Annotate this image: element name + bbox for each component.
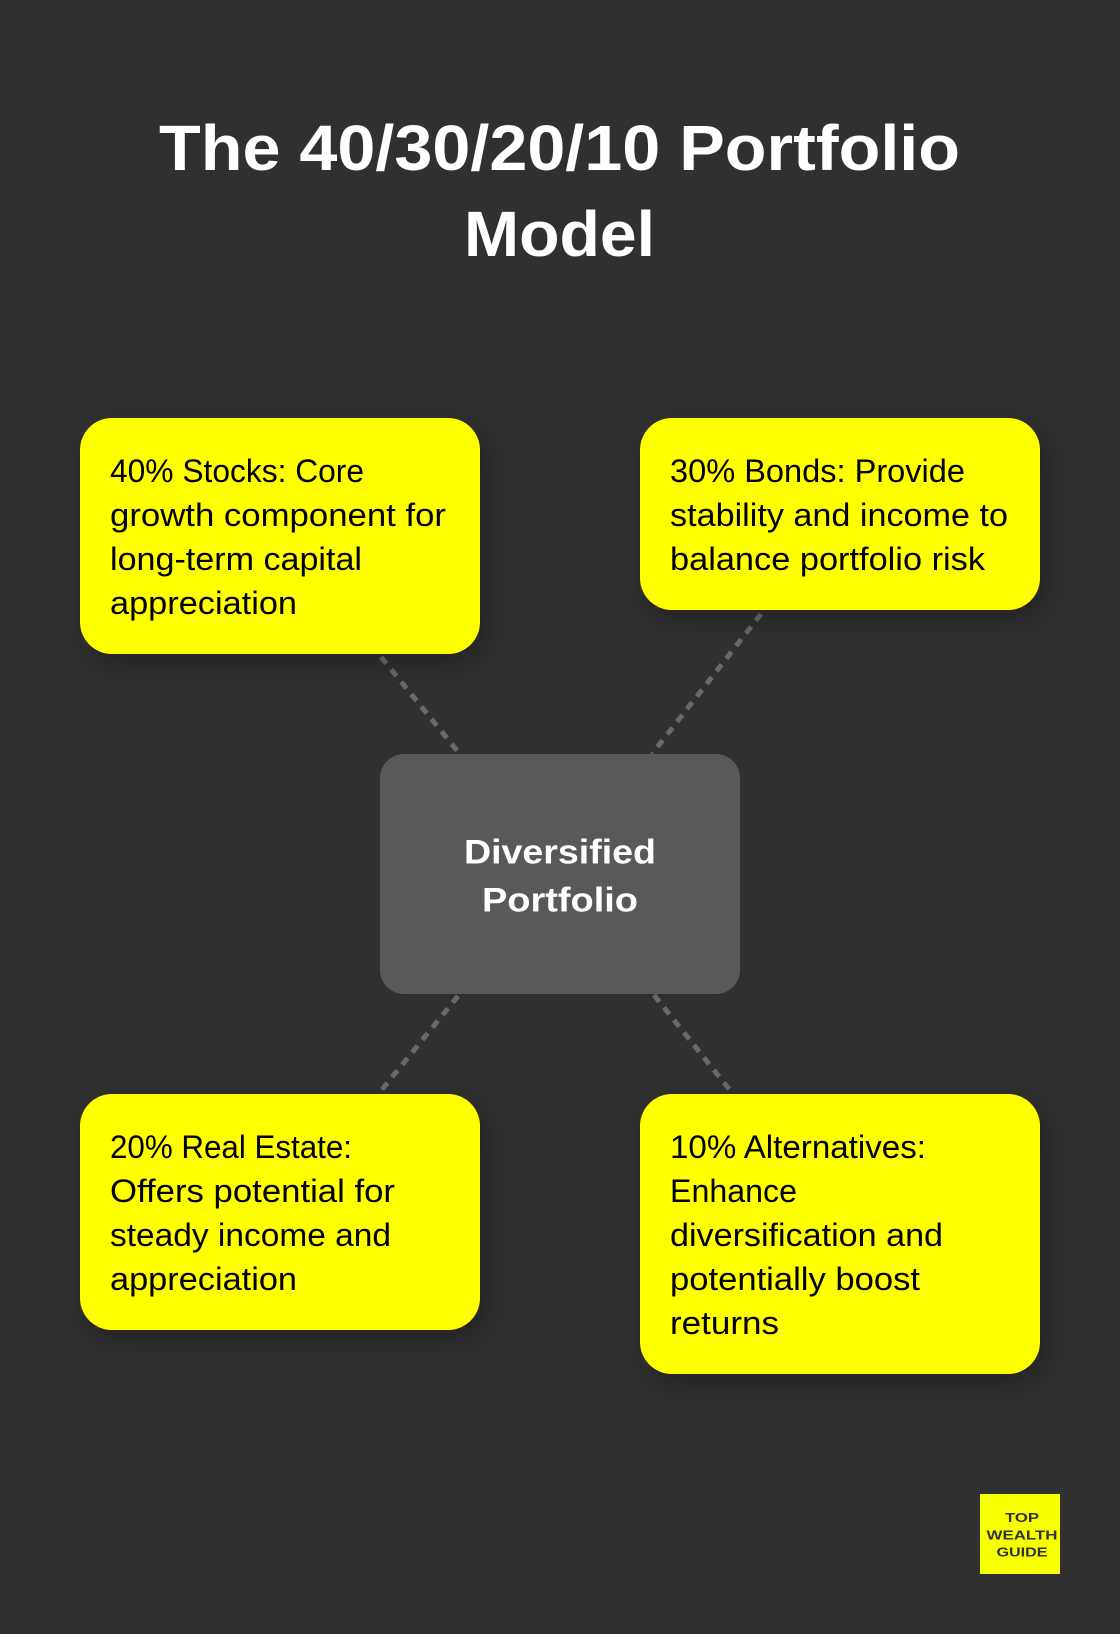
panel: 30% bonds: 30% Bonds: Provide	[670, 453, 965, 489]
panel: 20% real estate: Offers potential for	[110, 1173, 395, 1209]
title	[159, 112, 960, 270]
panel: 20% real estate: 20% Real Estate:	[110, 1129, 352, 1165]
logo: top wealth guide	[980, 1494, 1060, 1574]
connector: stocks to center	[381, 657, 459, 753]
panel: 40% stocks: 40% Stocks: Core	[110, 453, 364, 489]
panel: 40% stocks	[80, 418, 480, 654]
panel: center diversified portfolio: Diversified	[464, 834, 656, 872]
connector: bonds to center	[652, 614, 761, 754]
panel: center diversified portfolio	[380, 754, 740, 994]
title: Model	[464, 198, 655, 270]
panel: 20% real estate	[80, 1094, 480, 1330]
logo: top wealth guide: TOP	[1005, 1510, 1039, 1525]
panel: 40% stocks: growth component for	[110, 497, 446, 533]
panel: 30% bonds: stability and income to	[670, 497, 1008, 533]
panel: 10% alternatives: 10% Alternatives:	[670, 1129, 926, 1165]
panel: 30% bonds: balance portfolio risk	[670, 541, 986, 577]
panel: 10% alternatives: diversification and	[670, 1217, 943, 1253]
logo: top wealth guide: WEALTH	[986, 1528, 1058, 1542]
panel: 10% alternatives: returns	[670, 1305, 779, 1341]
panel: 20% real estate: appreciation	[110, 1261, 297, 1297]
logo: top wealth guide: GUIDE	[996, 1544, 1048, 1560]
panel: 40% stocks: appreciation	[110, 585, 297, 621]
panel: center diversified portfolio: Portfolio	[482, 882, 638, 920]
title: The 40/30/20/10 Portfolio	[159, 112, 960, 184]
panel: 10% alternatives	[640, 1094, 1040, 1374]
connector: alternatives to center	[654, 995, 733, 1094]
connector: real estate to center	[380, 996, 458, 1092]
panel: 20% real estate: steady income and	[110, 1217, 391, 1253]
panel: 10% alternatives: potentially boost	[670, 1261, 920, 1297]
panel: 30% bonds	[640, 418, 1040, 610]
panel: 40% stocks: long-term capital	[110, 541, 362, 577]
panel: 10% alternatives: Enhance	[670, 1173, 797, 1209]
